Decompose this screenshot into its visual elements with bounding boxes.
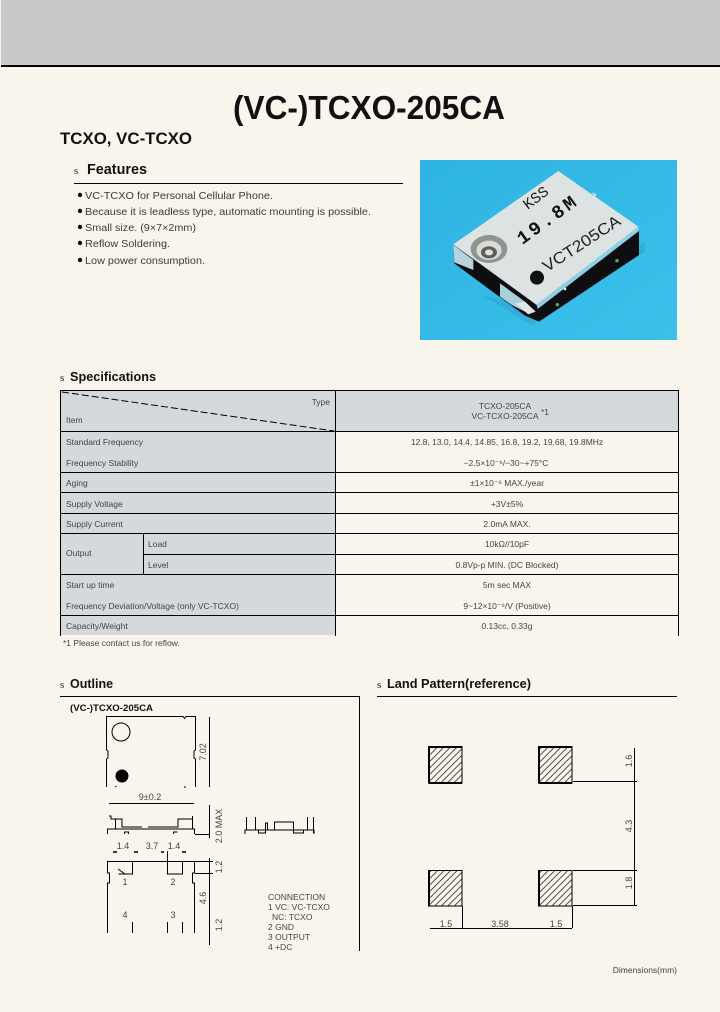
specifications table: Start up time (66, 580, 114, 590)
title: (VC-)TCXO-205CA (233, 89, 505, 126)
features list: Reflow Soldering. (85, 238, 170, 250)
panel: outline drawing: (VC-)TCXO-205CA (70, 703, 153, 714)
panel: land pattern (428, 746, 637, 929)
top view: 9±0.2 (139, 792, 161, 802)
features heading: s (74, 165, 78, 177)
top view (106, 716, 210, 804)
subtitle: TCXO, VC-TCXO (60, 130, 192, 148)
specifications table: TCXO-205CA (479, 401, 532, 411)
side view (108, 805, 224, 843)
end view (245, 817, 314, 834)
specifications table: 2.0mA MAX. (483, 519, 531, 529)
dimension lines (430, 748, 637, 929)
specifications table: 12.8, 13.0, 14.4, 14.85, 16.8, 19.2, 19.68, 19.8MHz (411, 437, 603, 447)
pads (428, 746, 572, 906)
bottom view: 1.4 (117, 841, 129, 851)
features list: VC-TCXO for Personal Cellular Phone. (85, 190, 273, 202)
connection legend: NC: TCXO (272, 912, 313, 922)
table footnote: *1 Please contact us for reflow. (63, 638, 180, 648)
features list (78, 190, 371, 267)
specifications table: 9~12×10⁻⁶/V (Positive) (463, 601, 551, 611)
specifications heading: s (60, 372, 64, 384)
specifications table: *1 (541, 407, 549, 417)
specifications table: 0.8Vp-p MIN. (DC Blocked) (456, 560, 559, 570)
specifications table: Frequency Stability (66, 458, 139, 468)
connection legend: CONNECTION (268, 892, 325, 902)
dimension lines: 1.5 (550, 919, 562, 929)
bottom view: 3.7 (146, 841, 158, 851)
specifications table: 0.13cc, 0.33g (481, 621, 533, 631)
side view: 2.0 MAX (214, 809, 224, 843)
specifications table: ±1×10⁻⁶ MAX./year (470, 478, 544, 488)
specifications table: Output (66, 548, 92, 558)
specifications table: Item (66, 415, 83, 425)
features heading (74, 162, 403, 184)
connection legend: 1 VC: VC-TCXO (268, 902, 330, 912)
product photo: VCT205CA (540, 213, 624, 276)
specifications table: Standard Frequency (66, 437, 144, 447)
specifications table: Load (148, 539, 167, 549)
panel: features (74, 162, 403, 267)
connection legend: 3 OUTPUT (268, 932, 310, 942)
features list: Small size. (9×7×2mm) (85, 222, 196, 234)
specifications table: Level (148, 560, 168, 570)
specifications table: Type (312, 397, 330, 407)
product photo (420, 160, 677, 340)
product photo: 19.8M (513, 192, 581, 250)
specifications heading: Specifications (70, 370, 156, 384)
connection legend: 4 +DC (268, 942, 292, 952)
specifications table (60, 390, 678, 636)
bottom view: 4.6 (198, 892, 208, 904)
specifications table: Supply Voltage (66, 499, 123, 509)
connection legend (268, 892, 330, 952)
header band (1, 0, 720, 67)
dimensions note: Dimensions(mm) (613, 965, 677, 975)
top view: 7.02 (198, 743, 208, 761)
specifications table: 5m sec MAX (483, 580, 531, 590)
specifications table: Capacity/Weight (66, 621, 128, 631)
land pattern heading: Land Pattern(reference) (387, 677, 531, 691)
dimension lines: 1.6 (624, 755, 634, 767)
features heading: Features (87, 162, 147, 178)
outline heading: Outline (70, 677, 113, 691)
bottom view: 1.2 (214, 919, 224, 931)
dimension lines: 1.5 (440, 919, 452, 929)
panel: outline drawing (60, 696, 360, 952)
product photo: KSS (520, 183, 553, 214)
land pattern heading: s (377, 679, 381, 691)
connection legend: 2 GND (268, 922, 294, 932)
bottom view: 2 (170, 877, 176, 887)
bottom view: 1.4 (168, 841, 180, 851)
outline heading: s (60, 679, 64, 691)
specifications table: 10kΩ//10pF (485, 539, 529, 549)
land pattern heading (377, 677, 677, 697)
specifications table: VC-TCXO-205CA (471, 411, 539, 421)
bottom view: 4 (122, 910, 128, 920)
features list: Low power consumption. (85, 255, 205, 267)
bottom view (108, 841, 224, 945)
specifications table: Supply Current (66, 519, 123, 529)
dimension lines: 1.8 (624, 877, 634, 889)
specifications table: Aging (66, 478, 88, 488)
dimension lines: 3.58 (491, 919, 509, 929)
features list: Because it is leadless type, automatic mounting is possible. (85, 206, 371, 218)
bottom view: 1.2 (214, 861, 224, 873)
dimension lines: 4.3 (624, 820, 634, 832)
specifications table: −2.5×10⁻⁶/−30~+75°C (464, 458, 548, 468)
bottom view: 1 (122, 877, 128, 887)
bottom view: 3 (170, 910, 176, 920)
specifications table: Frequency Deviation/Voltage (only VC-TCXO) (66, 601, 239, 611)
specifications table: +3V±5% (491, 499, 524, 509)
